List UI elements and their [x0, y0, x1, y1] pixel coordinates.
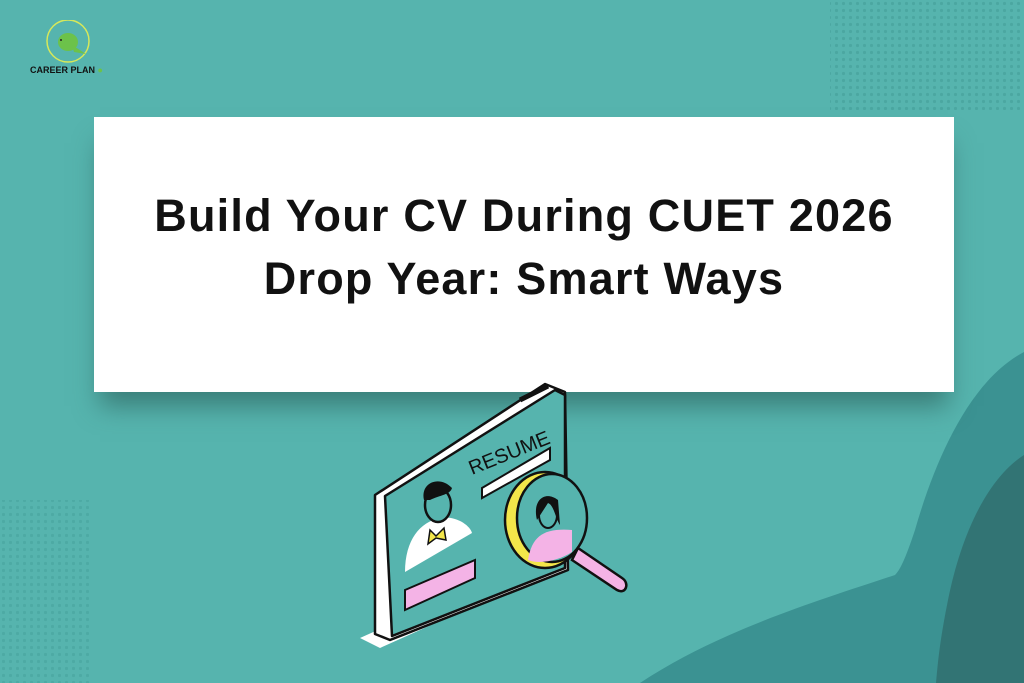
base — [360, 575, 520, 648]
illustration: resume with magnifier — [360, 382, 628, 648]
logo: CAREER PLAN ● — [30, 65, 103, 75]
title panel — [94, 117, 954, 392]
person — [405, 517, 472, 572]
title — [154, 190, 894, 304]
title: Drop Year: Smart Ways — [264, 253, 784, 304]
lens — [505, 472, 585, 568]
pink bar — [405, 560, 475, 610]
magnifier handle — [572, 548, 626, 591]
board back edge — [375, 384, 568, 640]
logo — [30, 20, 103, 75]
title: Build Your CV During CUET 2026 — [154, 190, 894, 241]
RESUME text: RESUME — [466, 427, 553, 480]
field bar — [482, 448, 550, 498]
